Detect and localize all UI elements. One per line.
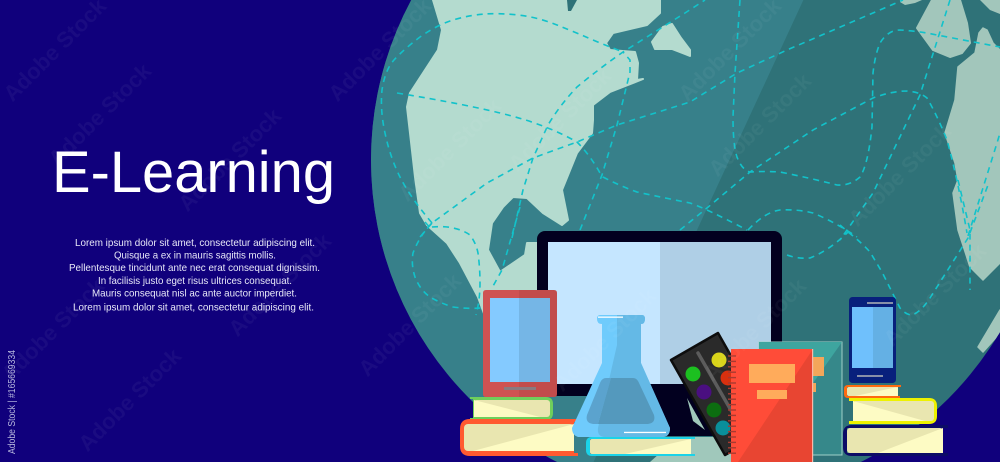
smartphone	[849, 297, 896, 383]
watermarks: Adobe Stock	[353, 268, 467, 381]
monitor frame top	[537, 231, 782, 396]
island: top north	[567, 0, 577, 11]
green page highlight	[474, 400, 540, 417]
flask right half	[598, 315, 670, 437]
navy pages	[847, 428, 943, 453]
body line 1: Lorem ipsum dolor sit amet, consectetur adipiscing elit.	[75, 237, 315, 249]
phone screen left	[852, 307, 873, 368]
navy cover	[843, 425, 948, 456]
green pages	[474, 400, 550, 417]
paint purple	[696, 384, 712, 400]
watermarks: Adobe Stock	[698, 273, 812, 386]
flask liquid left	[587, 378, 611, 424]
yellow pages	[853, 401, 934, 421]
book: cyan	[586, 437, 695, 456]
tablet	[483, 290, 557, 397]
watermarks: Adobe Stock	[548, 283, 662, 396]
body line 6: Lorem ipsum dolor sit amet, consectetur adipiscing elit.	[73, 302, 314, 314]
paint dark green	[706, 402, 722, 418]
teal book label large	[813, 357, 824, 376]
teal book upright	[759, 342, 842, 455]
flask highlight bottom	[624, 432, 666, 433]
orange cover	[460, 419, 578, 456]
orange page highlight	[473, 424, 574, 451]
body text block	[69, 237, 320, 314]
globe	[360, 0, 1000, 462]
teal book cover highlight	[759, 342, 842, 430]
dashed network routes	[381, 0, 1000, 315]
green cover	[470, 397, 553, 420]
body line 5: Mauris consequat nisl ac ante auctor imperdiet.	[92, 288, 297, 300]
continent: north america	[407, 0, 660, 330]
phone speaker	[867, 302, 893, 304]
tablet body right	[519, 290, 557, 397]
flask left half	[572, 315, 670, 437]
cyan page highlight	[625, 439, 691, 454]
island: madagascar	[978, 310, 1000, 352]
paint teal	[716, 420, 730, 436]
notebook right edge	[812, 349, 813, 462]
navy page highlight	[878, 428, 943, 453]
small orange pages	[847, 387, 898, 396]
flask liquid right	[598, 378, 654, 424]
orange pages	[464, 424, 574, 451]
teal book cover	[759, 342, 842, 455]
paint green	[686, 366, 700, 382]
continent: south america bottom	[650, 437, 735, 462]
palette body	[671, 333, 772, 455]
island: greenland	[652, 24, 690, 56]
notebook cover shadow	[738, 349, 813, 462]
tablet screen left	[490, 298, 519, 382]
book: small orange	[844, 385, 901, 398]
small orange page highlight	[855, 387, 898, 396]
phone body	[849, 297, 896, 383]
notebook cover	[731, 349, 813, 462]
yellow page highlight	[853, 401, 925, 421]
watermarks: Adobe Stock	[173, 103, 287, 216]
title: E-Learning	[52, 140, 335, 205]
body line 2: Quisque a ex in mauris sagittis mollis.	[114, 250, 276, 262]
tablet screen right	[519, 298, 550, 382]
watermarks: Adobe Stock	[223, 228, 337, 341]
teal book label small	[813, 383, 816, 392]
notebook label large	[749, 364, 795, 383]
phone home bar	[857, 375, 883, 377]
continent: europe	[917, 0, 970, 57]
phone screen right	[873, 307, 893, 368]
watermarks: Adobe Stock	[73, 343, 187, 456]
book: orange large	[460, 419, 578, 456]
watermarks: Adobe Stock	[878, 238, 992, 351]
paint red	[720, 370, 736, 386]
globe lighter shaded side	[360, 0, 808, 462]
tablet home bar	[504, 387, 536, 390]
yellow cover	[849, 398, 937, 424]
continent: africa	[945, 28, 1000, 280]
red notebook	[728, 349, 813, 462]
body line 4: In facilisis justo eget risus ultrices consequat.	[98, 275, 292, 287]
book: yellow	[849, 398, 937, 424]
watermarks: Adobe Stock	[703, 68, 817, 181]
book: navy	[843, 425, 948, 456]
palette stick	[698, 353, 732, 412]
stock id side label: Adobe Stock | #165669334	[7, 350, 18, 454]
notebook spiral	[728, 356, 736, 453]
cyan cover	[586, 437, 695, 456]
globe base sphere	[360, 0, 1000, 462]
monitor frame lower right	[590, 384, 782, 436]
watermarks: Adobe Stock	[503, 63, 617, 176]
monitor screen left	[548, 242, 660, 384]
monitor screen right	[660, 242, 771, 384]
body line 3: Pellentesque tincidunt ante nec erat consequat dignissim.	[69, 262, 320, 274]
continent: northern corner	[980, 0, 1000, 14]
globe sliver behind palette	[687, 398, 705, 430]
small orange cover	[844, 385, 901, 398]
monitor	[537, 231, 782, 436]
flask	[572, 315, 670, 437]
tablet body left	[483, 290, 519, 397]
watermarks: Adobe Stock	[43, 58, 157, 171]
book: green	[470, 397, 553, 420]
cyan pages	[590, 439, 691, 454]
watermarks: Adobe Stock	[393, 93, 507, 206]
notebook label small	[757, 390, 787, 399]
flask highlight top	[598, 316, 623, 318]
island: top sliver	[900, 0, 922, 5]
watermarks: Adobe Stock	[843, 118, 957, 231]
paint palette	[671, 333, 772, 455]
paint yellow	[712, 352, 726, 368]
